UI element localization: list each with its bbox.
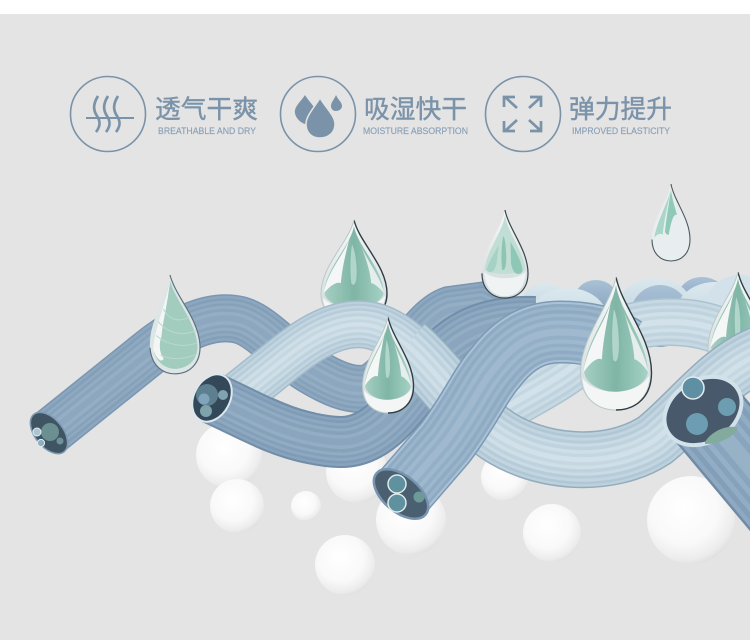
tube end 2: [184, 367, 240, 429]
droplet 7: [708, 272, 750, 377]
heading: improved elasticity: [569, 96, 672, 136]
fibre: light rear loop: [480, 322, 748, 425]
droplet 4: [482, 210, 528, 298]
tube end 4: [652, 363, 750, 459]
fibre: dark front tube: [401, 332, 625, 494]
heading: moisture absorption: MOISTURE ABSORPTION: [363, 126, 468, 136]
fibre: dark back tube: [49, 306, 510, 433]
heading: moisture absorption: 吸湿快干: [364, 96, 467, 124]
fibre: right foreground tube: [703, 411, 750, 545]
icon: breathable waves: [70, 76, 146, 152]
droplet 2: [321, 220, 387, 322]
back fibre bumps: [521, 275, 750, 352]
heading: breathable and dry: BREATHABLE AND DRY: [158, 126, 256, 136]
fibre: dark lower tube front section: [212, 398, 310, 438]
droplet 5: [652, 184, 690, 261]
icon: expanding arrows: [486, 76, 560, 152]
heading: breathable and dry: [155, 96, 258, 136]
heading: improved elasticity: IMPROVED ELASTICITY: [572, 126, 670, 136]
droplet 3: [362, 317, 414, 413]
heading: moisture absorption: [363, 96, 468, 136]
white spheres: [196, 422, 735, 595]
fibre: light woven tube, tapered start: [235, 324, 407, 398]
fibre: dark lower tube: [212, 322, 535, 442]
tube end 3: [365, 460, 437, 528]
droplet 1: [145, 273, 202, 376]
fibre: light woven tube, main section: [407, 345, 750, 460]
heading: breathable and dry: 透气干爽: [155, 96, 258, 124]
icon: water drops: [280, 76, 356, 152]
heading: improved elasticity: 弹力提升: [569, 96, 672, 124]
tube end 1: [23, 406, 75, 460]
droplet 6: [580, 277, 652, 410]
